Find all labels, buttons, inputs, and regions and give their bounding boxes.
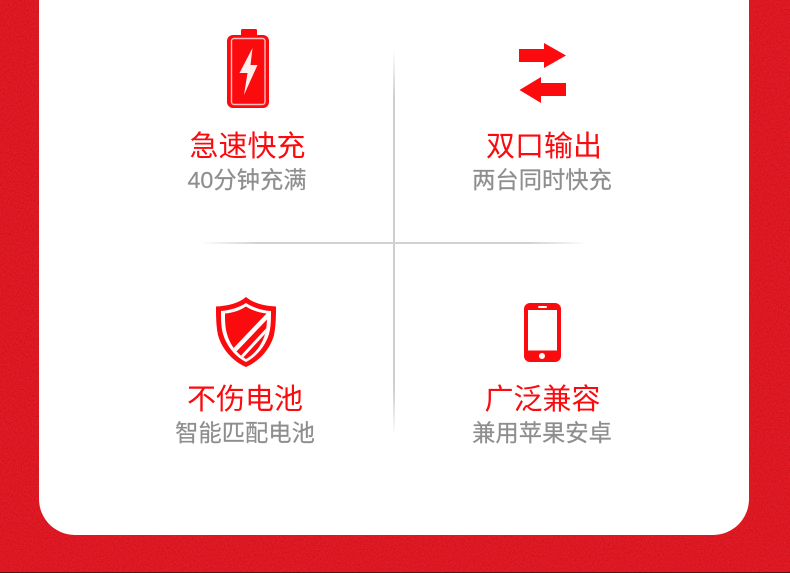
text: compatible with Apple and Android: 兼用苹果安卓 — [472, 420, 612, 446]
vertical divider — [393, 50, 395, 436]
icon: battery with lightning bolt — [227, 29, 269, 108]
heading: dual port output: 双口输出 — [486, 131, 602, 163]
text: full charge in 40 minutes: 40分钟充满 — [187, 167, 307, 193]
heading: fast charge: 急速快充 — [189, 131, 306, 163]
text: smart battery matching: 智能匹配电池 — [175, 420, 315, 446]
icon: two opposite arrows — [519, 43, 566, 103]
horizontal divider — [200, 242, 588, 244]
text: two devices fast charge at once: 两台同时快充 — [472, 167, 612, 193]
heading: wide compatibility: 广泛兼容 — [484, 384, 600, 416]
icon: smartphone — [524, 303, 561, 362]
icon: striped shield — [216, 297, 276, 367]
heading: no battery damage: 不伤电池 — [187, 384, 303, 416]
